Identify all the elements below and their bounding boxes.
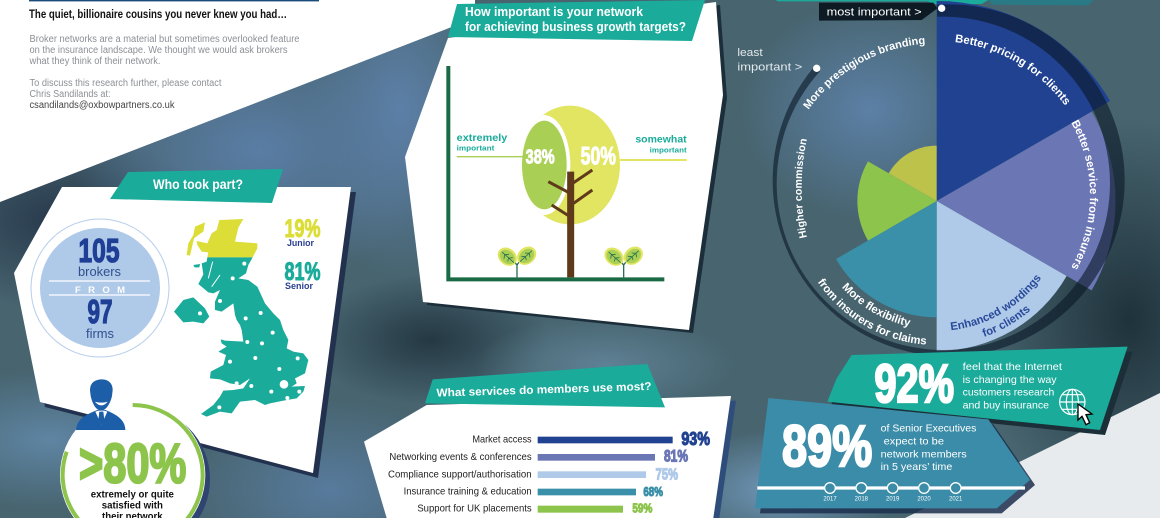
brokers and firms circle: 97	[88, 294, 112, 331]
icon: business person	[76, 379, 125, 430]
label: extremely important: important	[457, 146, 495, 153]
intro paragraph	[29, 34, 300, 100]
row: networking events: 81%	[664, 448, 688, 466]
label: somewhat important: somewhat	[635, 135, 687, 146]
timeline 2017 to 2021: 2020	[917, 497, 931, 503]
UK map	[174, 219, 308, 417]
satisfaction caption: satisfied with	[102, 501, 163, 512]
label: extremely important: extremely	[457, 133, 508, 144]
least important marker: important >	[737, 62, 802, 74]
chart axes	[448, 66, 664, 279]
junior share	[284, 215, 320, 248]
panel: services	[364, 364, 736, 518]
satisfaction circle	[60, 379, 210, 518]
label: extremely important	[457, 133, 523, 157]
row: market access: 93%	[681, 428, 710, 449]
sector: better service	[937, 112, 1116, 290]
brokers and firms circle: FROM	[75, 285, 125, 296]
tree trunk and branches	[548, 170, 592, 277]
callout: 89 percent: expect to be	[884, 436, 944, 447]
row: insurance training: 68%	[643, 484, 663, 499]
timeline 2017 to 2021: 2017	[823, 497, 837, 503]
callout: 92 percent: customers research	[963, 388, 1054, 399]
satisfaction caption	[91, 489, 175, 518]
row: market access	[472, 428, 710, 449]
intro panel	[0, 0, 475, 202]
sector: enhanced wordings	[937, 201, 1067, 351]
callout: 92 percent: feel that the Internet	[963, 362, 1062, 373]
sector: more flexibility	[836, 201, 937, 317]
callout: 92 percent: and buy insurance	[963, 401, 1049, 412]
callout: 89 percent: network members	[881, 449, 967, 460]
brokers and firms circle	[31, 219, 169, 357]
row: compliance support: 75%	[656, 466, 678, 483]
brokers and firms circle: firms	[86, 327, 114, 341]
senior share	[284, 258, 320, 291]
heading: services	[425, 364, 665, 407]
timeline 2017 to 2021: 2019	[886, 497, 900, 503]
junior share: Junior	[287, 238, 314, 248]
brokers and firms circle: 105	[78, 233, 120, 270]
label: higher commission: Higher commission	[794, 139, 807, 238]
satisfaction figure: >80%	[79, 433, 186, 495]
most important marker: most important >	[827, 7, 922, 19]
label: for clients: for clients	[982, 306, 1030, 337]
heading: services: What services do members use most?	[436, 381, 652, 400]
top teal strips	[775, 0, 1093, 5]
senior share: Senior	[285, 281, 313, 291]
least important marker: least	[737, 47, 763, 59]
intro paragraph: on the insurance landscape. We thought we would ask brokers	[30, 45, 288, 56]
callout: 89 percent	[755, 398, 1035, 513]
label: better service: Better service from insurers	[1072, 120, 1098, 270]
sector: prestigious branding	[889, 146, 937, 201]
sector: better pricing	[937, 1, 1110, 201]
label: from insurers for claims: from insurers for claims	[818, 278, 926, 344]
row: networking events	[389, 448, 688, 466]
timeline 2017 to 2021: 2018	[855, 497, 869, 503]
callout: 89 percent: 89%	[782, 414, 872, 479]
timeline 2017 to 2021: 2021	[949, 497, 963, 503]
row: market access: Market access	[472, 435, 532, 446]
row: UK placements: Support for UK placements	[417, 504, 532, 515]
label: somewhat important: important	[650, 147, 687, 154]
most important marker	[819, 3, 945, 21]
least important marker	[737, 47, 820, 74]
label: enhanced wordings: Enhanced wordings	[950, 275, 1040, 330]
heading: network importance: for achieving business growth targets?	[465, 20, 686, 34]
callout: 89 percent: in 5 years’ time	[881, 462, 952, 473]
row: networking events: Networking events & conferences	[389, 452, 532, 463]
row: UK placements	[417, 501, 653, 516]
38 percent: 38%	[526, 145, 555, 168]
intro paragraph: Chris Sandilands at:	[30, 89, 110, 100]
intro paragraph: what they think of their network.	[29, 56, 160, 67]
intro paragraph: Broker networks are a material but sometimes overlooked feature	[30, 34, 300, 45]
panel: network importance	[405, 0, 727, 333]
heading: who took part: Who took part?	[153, 176, 243, 192]
row: insurance training: Insurance training & education	[404, 487, 532, 498]
icon: seedling right	[601, 243, 647, 277]
timeline 2017 to 2021	[757, 483, 1025, 503]
heading: network importance: How important is your network	[465, 5, 643, 19]
row: UK placements: 59%	[632, 501, 653, 516]
label: better pricing: Better pricing for clients	[956, 34, 1069, 105]
heading: who took part	[110, 169, 283, 203]
satisfaction caption: extremely or quite	[91, 489, 175, 500]
sector: higher commission	[857, 161, 937, 241]
tree crown	[518, 106, 620, 224]
row: compliance support	[388, 466, 678, 483]
50 percent: 50%	[581, 143, 616, 171]
light grey corner bottom right	[905, 393, 1160, 518]
callout: 92 percent: is changing the way	[963, 375, 1057, 386]
label: prestigious branding: More prestigious branding	[802, 38, 925, 110]
wheel chart: value of network features	[737, 0, 1125, 353]
label: more flexibility: More flexibility	[842, 282, 911, 328]
callout: 92 percent	[827, 347, 1133, 435]
callout: 92 percent: 92%	[874, 354, 954, 414]
icon: globe and cursor	[1060, 389, 1092, 425]
senior share: 81%	[284, 258, 320, 286]
icon: seedling left	[494, 243, 540, 277]
junior share: 19%	[284, 215, 320, 243]
panel: who took part	[14, 169, 356, 478]
heading: network importance	[448, 0, 705, 41]
callout: 89 percent: of Senior Executives	[881, 423, 977, 434]
label: somewhat important	[620, 135, 687, 160]
intro heading: The quiet, billionaire cousins you never knew you had…	[29, 9, 287, 21]
outer ring	[773, 4, 1125, 356]
intro paragraph: To discuss this research further, please contact	[30, 78, 222, 89]
contact email: csandilands@oxbowpartners.co.uk	[30, 100, 175, 111]
row: compliance support: Compliance support/authorisation	[388, 469, 532, 480]
row: insurance training	[404, 484, 663, 499]
brokers and firms circle: brokers	[78, 265, 121, 279]
